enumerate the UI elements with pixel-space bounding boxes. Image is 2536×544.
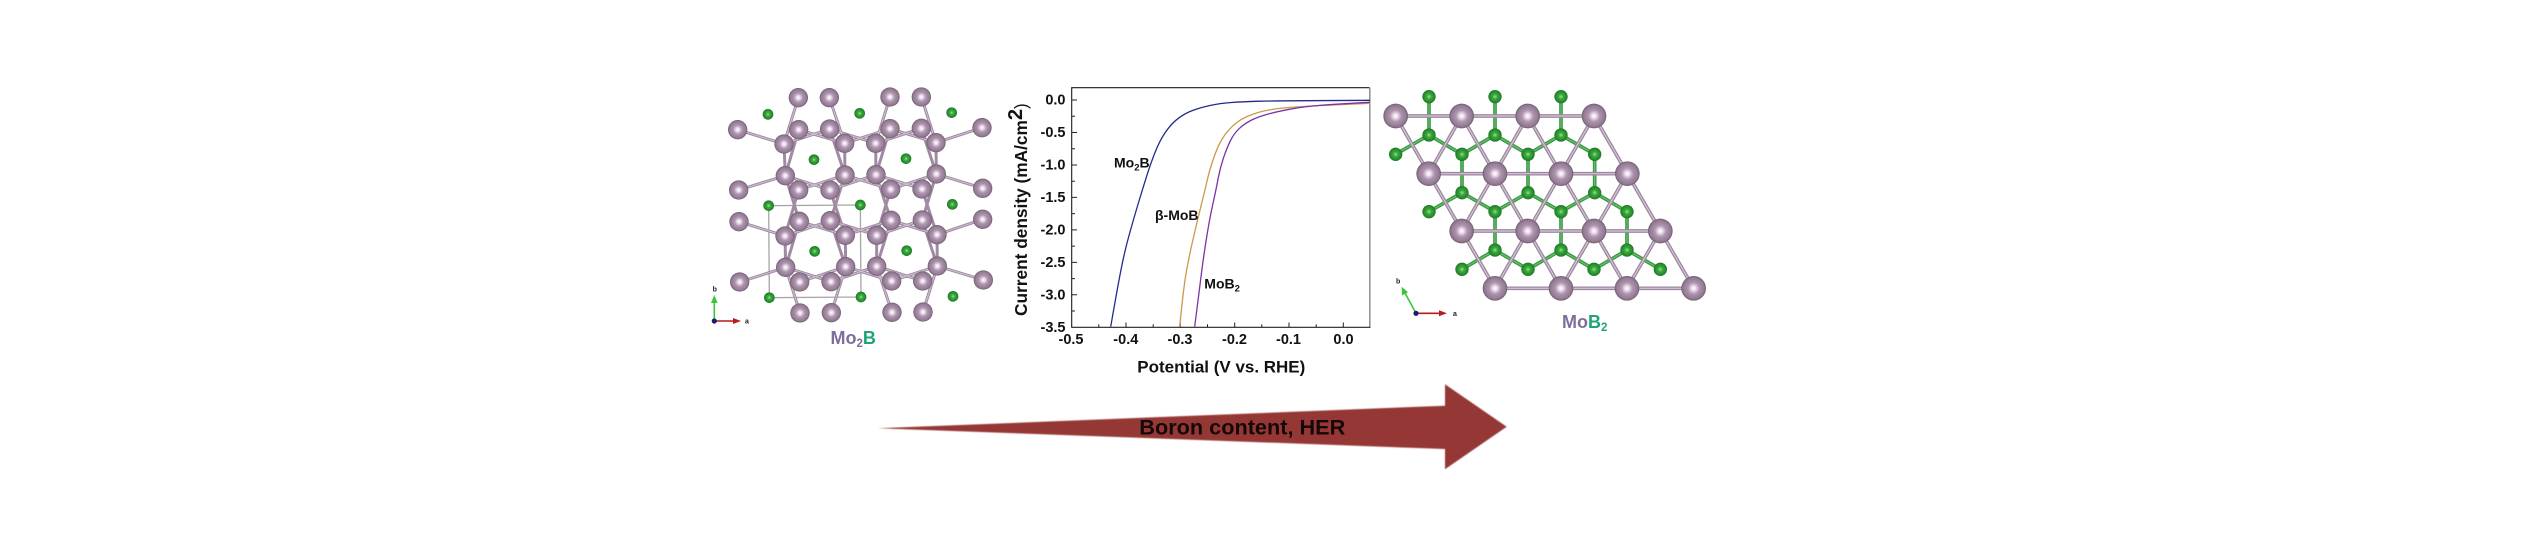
icon: Mo2B crystal axes bbox=[711, 286, 749, 326]
y axis numbers: -2.5 bbox=[1040, 255, 1066, 271]
icon: Mo2B crystal axes: a bbox=[745, 318, 749, 326]
caption: MoB2: MoB bbox=[1562, 312, 1601, 332]
curve: Mo2B bbox=[1111, 100, 1370, 327]
x axis numbers bbox=[1058, 332, 1354, 348]
molybdenum atoms bbox=[1383, 104, 1706, 301]
plot frame bbox=[1072, 88, 1370, 327]
axis ticks bbox=[1072, 100, 1343, 327]
icon: Mo2B crystal axes: b bbox=[713, 286, 717, 294]
Mo-Mo bonds bbox=[1396, 116, 1694, 288]
y axis numbers: -3.5 bbox=[1040, 320, 1066, 336]
icon: MoB2 crystal axes: a bbox=[1453, 311, 1457, 318]
y axis numbers: -3.0 bbox=[1040, 288, 1066, 304]
chart: current density vs potential bbox=[1005, 88, 1370, 376]
boron atoms bbox=[1389, 90, 1667, 276]
caption: Mo2B: B bbox=[863, 328, 876, 348]
label: Mo2B: B bbox=[1140, 155, 1150, 171]
y axis numbers: 0.0 bbox=[1045, 92, 1066, 108]
y axis numbers bbox=[1040, 92, 1066, 336]
caption: Mo2B: Mo bbox=[830, 328, 856, 348]
x axis numbers: -0.2 bbox=[1222, 332, 1247, 348]
arrow label: Boron content, HER bbox=[1139, 416, 1345, 439]
Mo-Mo bonds bbox=[738, 97, 983, 313]
label: Mo2B: Mo bbox=[1114, 155, 1134, 171]
label: Mo2B: 2 bbox=[1134, 163, 1140, 174]
x axis numbers: 0.0 bbox=[1333, 332, 1354, 348]
x axis numbers: -0.4 bbox=[1113, 332, 1138, 348]
x axis numbers: -0.1 bbox=[1276, 332, 1301, 348]
arrow: increasing boron content and HER bbox=[878, 384, 1507, 469]
x axis title: Potential (V vs. RHE) bbox=[1137, 357, 1305, 376]
icon: MoB2 crystal axes bbox=[1396, 278, 1457, 318]
caption: Mo2B: 2 bbox=[856, 338, 863, 350]
icon: MoB2 crystal axes: b bbox=[1396, 278, 1400, 286]
molybdenum atoms bbox=[728, 87, 993, 323]
boron atoms bbox=[763, 107, 958, 303]
unit cell outline bbox=[769, 205, 861, 298]
label: beta-MoB: β-MoB bbox=[1155, 207, 1199, 223]
label: MoB2: MoB bbox=[1204, 275, 1235, 291]
y axis title: Current density (mA/cm bbox=[1011, 120, 1031, 316]
caption: MoB2: 2 bbox=[1601, 322, 1607, 334]
panel: Mo2B crystal structure bbox=[711, 87, 993, 350]
y axis numbers: -0.5 bbox=[1040, 125, 1066, 141]
B-B bonds bbox=[1396, 97, 1660, 269]
y axis title: 2 bbox=[1005, 109, 1027, 120]
y axis numbers: -2.0 bbox=[1040, 222, 1066, 238]
x axis numbers: -0.3 bbox=[1168, 332, 1192, 348]
label: MoB2: 2 bbox=[1235, 283, 1240, 294]
y axis numbers: -1.5 bbox=[1040, 190, 1066, 206]
curve: beta-MoB bbox=[1180, 103, 1370, 327]
y axis title: ) bbox=[1011, 103, 1031, 109]
curve: MoB2 bbox=[1195, 102, 1370, 327]
panel: MoB2 crystal structure bbox=[1383, 90, 1706, 334]
y axis numbers: -1.0 bbox=[1040, 158, 1066, 174]
x axis numbers: -0.5 bbox=[1058, 332, 1084, 348]
